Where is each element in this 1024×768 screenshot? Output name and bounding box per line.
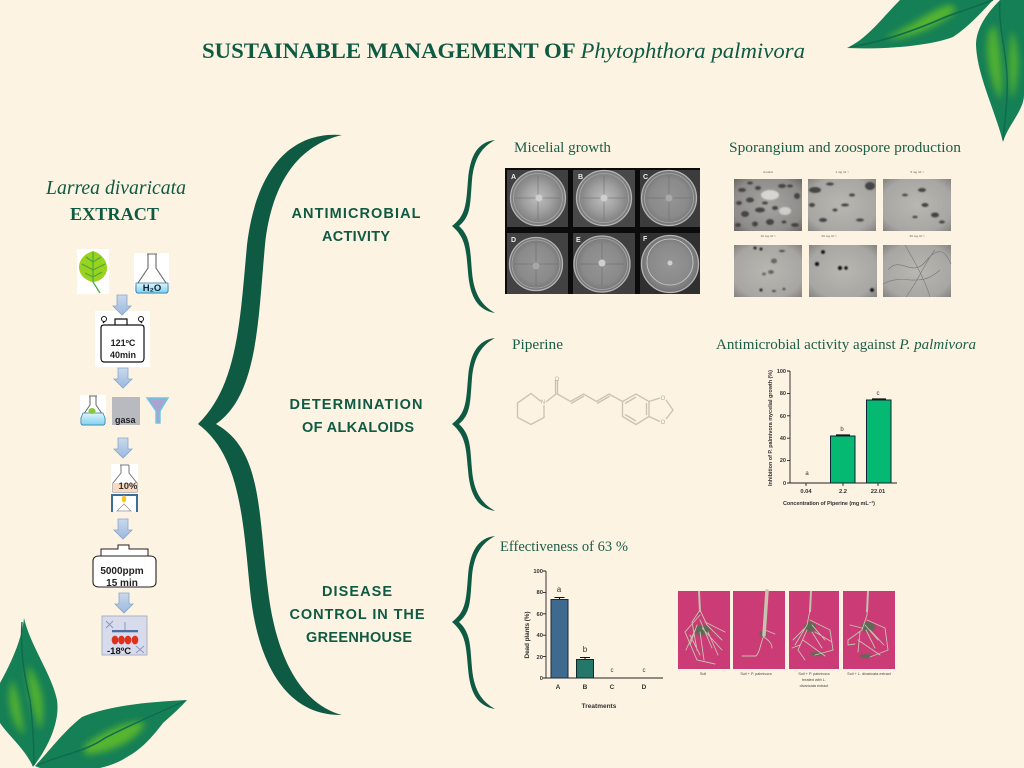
icon: centrifuge: 5000ppm	[100, 566, 144, 577]
photo panel: sporangium micrographs: 10 mg ml⁻¹	[761, 234, 775, 238]
heading: sporangium: Sporangium and zoospore production	[729, 140, 962, 156]
photo panel: petri dishes: D	[511, 237, 516, 244]
small brace: alkaloids	[452, 338, 495, 511]
photo panel: plant roots: Soil + P. palmivora	[740, 672, 773, 676]
bar chart: piperine inhibition: b	[840, 427, 844, 433]
decorative leaves: bottom left	[0, 618, 187, 768]
section label: determination of alkaloids	[290, 397, 422, 436]
bar chart: dead plants: 20	[537, 655, 543, 661]
heading: micelial growth: Micelial growth	[514, 140, 611, 156]
section label: disease control: DISEASE	[322, 584, 392, 600]
icon: funnel	[147, 398, 168, 423]
heading: effectiveness: Effectiveness of 63 %	[500, 539, 628, 555]
icon: autoclave	[95, 311, 150, 367]
photo panel: petri dishes: F	[643, 236, 648, 243]
icon: centrifuge: 15 min	[106, 578, 138, 589]
bar chart: dead plants: C	[610, 684, 615, 691]
bar chart: piperine inhibition: 20	[780, 458, 786, 464]
bar chart: dead plants: A	[556, 684, 561, 691]
icon: heated flask: 10%	[118, 481, 138, 492]
photo panel: plant roots: divaricata extract	[800, 684, 829, 688]
big brace	[198, 135, 342, 715]
chemical structure: piperine: N	[541, 400, 545, 406]
bar chart: piperine inhibition: c	[876, 391, 880, 397]
bar chart: piperine inhibition: 40	[780, 436, 786, 442]
bar chart: dead plants: b	[583, 645, 588, 654]
heading: extract: Larrea divaricata	[45, 177, 186, 199]
chemical structure: piperine: O	[661, 420, 666, 426]
icon: autoclave: 121ºC	[111, 338, 136, 348]
bar chart: piperine inhibition: 0.04	[800, 489, 812, 495]
arrow	[114, 368, 132, 388]
bar chart: piperine inhibition	[768, 369, 897, 507]
section label: antimicrobial activity: ACTIVITY	[322, 229, 390, 245]
arrow	[114, 519, 132, 539]
bar chart: piperine inhibition: 80	[780, 391, 786, 397]
bar chart: piperine inhibition: 22.01	[871, 489, 886, 495]
section label: determination of alkaloids: DETERMINATION	[290, 397, 422, 413]
photo panel: sporangium micrographs	[734, 170, 951, 297]
bar chart: dead plants: c	[642, 668, 646, 674]
bar chart: piperine inhibition: 2.2	[839, 489, 847, 495]
icon: water flask: H₂O	[143, 283, 161, 294]
chemical structure: piperine	[518, 377, 673, 426]
section label: antimicrobial activity	[292, 206, 421, 245]
section label: disease control: CONTROL IN THE	[290, 607, 425, 623]
photo panel: sporangium micrographs: 30 mg ml⁻¹	[910, 234, 924, 238]
section label: determination of alkaloids: OF ALKALOIDS	[302, 420, 414, 436]
photo panel: plant roots: Soil	[700, 672, 706, 676]
heading: antimicrobial activity against: Antimicrobial activity against P. palmivora	[716, 337, 976, 353]
arrow	[114, 438, 132, 458]
bar chart: dead plants: c	[610, 668, 614, 674]
icon: autoclave: 40min	[110, 350, 136, 360]
photo panel: petri dishes: B	[578, 174, 583, 181]
icon: gauze	[112, 397, 140, 425]
icon: gauze: gasa	[115, 415, 137, 425]
icon: freezer	[102, 616, 147, 657]
photo panel: petri dishes: E	[576, 237, 581, 244]
bar chart: piperine inhibition: 0	[783, 481, 786, 487]
icon: water flask	[134, 253, 169, 294]
bar chart: piperine inhibition: Concentration of Piperine (mg mL⁻¹)	[783, 500, 875, 507]
icon: centrifuge	[93, 545, 156, 589]
photo panel: petri dishes: C	[643, 174, 648, 181]
bar chart: dead plants: 60	[537, 612, 543, 618]
photo panel: petri dishes: A	[511, 174, 516, 181]
chemical structure: piperine: O	[661, 396, 666, 402]
bar chart: dead plants: D	[642, 684, 647, 691]
photo panel: sporangium micrographs: 20 mg ml⁻¹	[822, 234, 836, 238]
photo panel: plant roots: Soil + P. palmivora	[798, 672, 831, 676]
bar chart: piperine inhibition: a	[805, 471, 809, 477]
bar chart: dead plants: 100	[533, 569, 543, 575]
heading: piperine: Piperine	[512, 337, 563, 353]
icon: flask with leaf	[80, 395, 106, 426]
bar chart: piperine inhibition: 60	[780, 414, 786, 420]
icon: freezer: -18ºC	[107, 646, 131, 657]
bar chart: dead plants: 80	[537, 590, 543, 596]
photo panel: sporangium micrographs: 1 mg ml⁻¹	[835, 170, 849, 174]
panel: extract flow	[45, 177, 186, 657]
bar chart: dead plants: B	[583, 684, 588, 691]
photo panel: sporangium micrographs: Control	[763, 170, 773, 174]
small brace: antimicrobial	[452, 140, 495, 313]
arrow	[115, 593, 133, 613]
bar chart: dead plants	[524, 569, 663, 710]
section label: disease control	[290, 584, 425, 646]
bar chart: dead plants: Treatments	[582, 703, 617, 710]
photo panel: plant roots: treated with L.	[802, 678, 826, 682]
heading: extract: EXTRACT	[70, 204, 159, 224]
photo panel: petri dishes	[505, 168, 700, 294]
icon: heated flask	[111, 464, 138, 512]
small brace: greenhouse	[452, 536, 495, 709]
section label: antimicrobial activity: ANTIMICROBIAL	[292, 206, 421, 222]
bar chart: dead plants: a	[557, 585, 562, 594]
decorative leaves: top right	[847, 0, 1024, 142]
bar chart: piperine inhibition: 100	[777, 369, 786, 375]
arrow	[113, 295, 131, 315]
bar chart: piperine inhibition: Inhibition of P. palmivora mycelial growth (%)	[768, 370, 774, 486]
photo panel: plant roots: Soil + L. divaricata extract	[847, 672, 892, 676]
bar chart: dead plants: 40	[537, 633, 543, 639]
icon: leaf	[77, 249, 109, 294]
title: SUSTAINABLE MANAGEMENT OF Phytophthora palmivora	[202, 38, 805, 63]
chemical structure: piperine: O	[555, 377, 560, 383]
photo panel: plant roots	[678, 591, 895, 688]
bar chart: dead plants: Dead plants (%)	[524, 612, 531, 658]
heading: extract	[45, 177, 186, 224]
section label: disease control: GREENHOUSE	[306, 630, 412, 646]
photo panel: sporangium micrographs: 5 mg ml⁻¹	[910, 170, 924, 174]
bar chart: dead plants: 0	[540, 676, 543, 682]
